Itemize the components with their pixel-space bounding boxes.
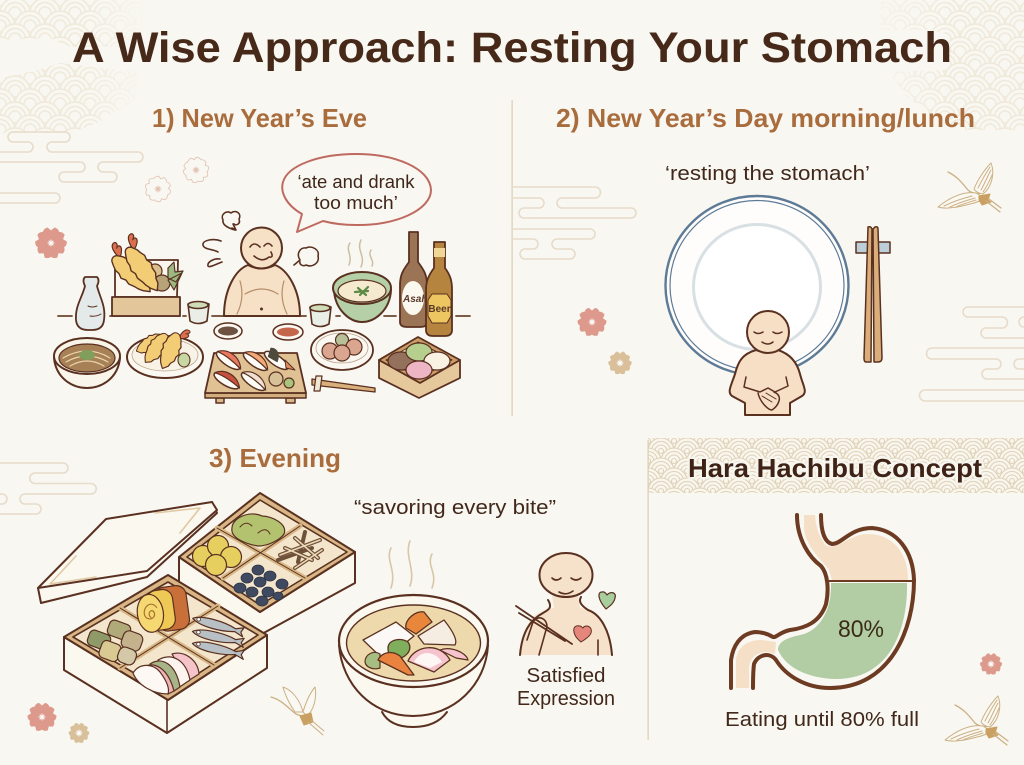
icon: crane xyxy=(945,696,1008,745)
decorative clouds xyxy=(512,187,1024,401)
icon: mochi box xyxy=(379,337,460,398)
label: 80%: 80% xyxy=(838,616,884,643)
icon: crane xyxy=(271,687,324,735)
icon: belly-full person xyxy=(224,228,300,316)
icon: tempura box xyxy=(99,233,183,316)
icon: tan blossom xyxy=(607,352,633,376)
text: savoring every bite: “savoring every bite” xyxy=(354,497,556,519)
panel: 1) New Year's Eve xyxy=(0,103,470,403)
box lid xyxy=(38,502,217,603)
icon: green soup bowl xyxy=(333,240,391,322)
text: Satisfied Expression: Expression xyxy=(517,688,615,710)
decorative clouds xyxy=(0,463,96,514)
icon: chopsticks on rest xyxy=(312,376,375,392)
callout: ate and drank too much: too much’ xyxy=(314,193,398,213)
text: Satisfied Expression xyxy=(517,665,615,710)
icon: sushi board xyxy=(205,345,306,403)
panel: Hara Hachibu Concept xyxy=(648,438,1024,745)
heading: New Year's Eve: 1) New Year’s Eve xyxy=(152,103,367,133)
icon: chopsticks xyxy=(856,227,890,362)
icon: sake flask xyxy=(76,277,104,330)
icon: bottles: Beer xyxy=(428,304,451,315)
icon: resting person xyxy=(730,311,805,415)
icon: tan blossom xyxy=(68,723,90,744)
seigaiha pattern: top left corner xyxy=(0,0,125,133)
icon: pink blossom xyxy=(979,653,1003,676)
callout: ate and drank too much: ‘ate and drank xyxy=(298,172,416,192)
icon: outlined blossoms xyxy=(141,156,212,206)
icon: stacked osechi boxes xyxy=(38,493,355,733)
text: Satisfied Expression: Satisfied xyxy=(526,665,606,687)
title: A Wise Approach: Resting Your Stomach xyxy=(72,24,952,72)
decorative clouds left xyxy=(0,132,143,203)
box upper xyxy=(179,493,355,635)
icon: soup bowl xyxy=(339,541,488,727)
icon: cups xyxy=(188,302,331,326)
icon: pink blossom xyxy=(26,703,58,733)
panel left border xyxy=(648,440,649,740)
box lower xyxy=(64,575,267,733)
icon: plate with takoyaki xyxy=(311,330,373,370)
chart: stomach 80% full xyxy=(731,515,914,688)
heading: Hara Hachibu Concept: Hara Hachibu Concept xyxy=(688,453,982,483)
icon: empty plate xyxy=(666,196,848,375)
icon: puffs and swirl xyxy=(203,212,318,267)
icon: bottles: Asahi xyxy=(402,294,430,305)
vertical divider xyxy=(512,100,513,416)
panel: 3) Evening xyxy=(0,443,615,744)
icon: crane xyxy=(938,163,1001,212)
icon: satisfied person xyxy=(516,553,615,655)
icon: pink blossom xyxy=(576,308,608,338)
seigaiha band xyxy=(648,438,1024,493)
heading: Evening: 3) Evening xyxy=(209,443,341,473)
panel: 2) New Year's Day morning/lunch xyxy=(512,103,1024,415)
text: Eating until 80% full: Eating until 80% full xyxy=(725,709,919,731)
text: resting the stomach: ‘resting the stomach’ xyxy=(665,163,870,185)
seigaiha pattern: top right corner xyxy=(888,0,1024,130)
callout: ate and drank too much xyxy=(282,154,431,232)
icon: bottles xyxy=(400,232,452,336)
heading: New Year's Day morning/lunch: 2) New Year’s Day morning/lunch xyxy=(556,103,975,133)
table line xyxy=(58,315,470,317)
icon: pink blossom xyxy=(34,227,68,260)
icon: tempura plate xyxy=(127,323,203,378)
icon: sauce dishes xyxy=(214,323,303,340)
icon: noodle bowl xyxy=(54,338,120,388)
